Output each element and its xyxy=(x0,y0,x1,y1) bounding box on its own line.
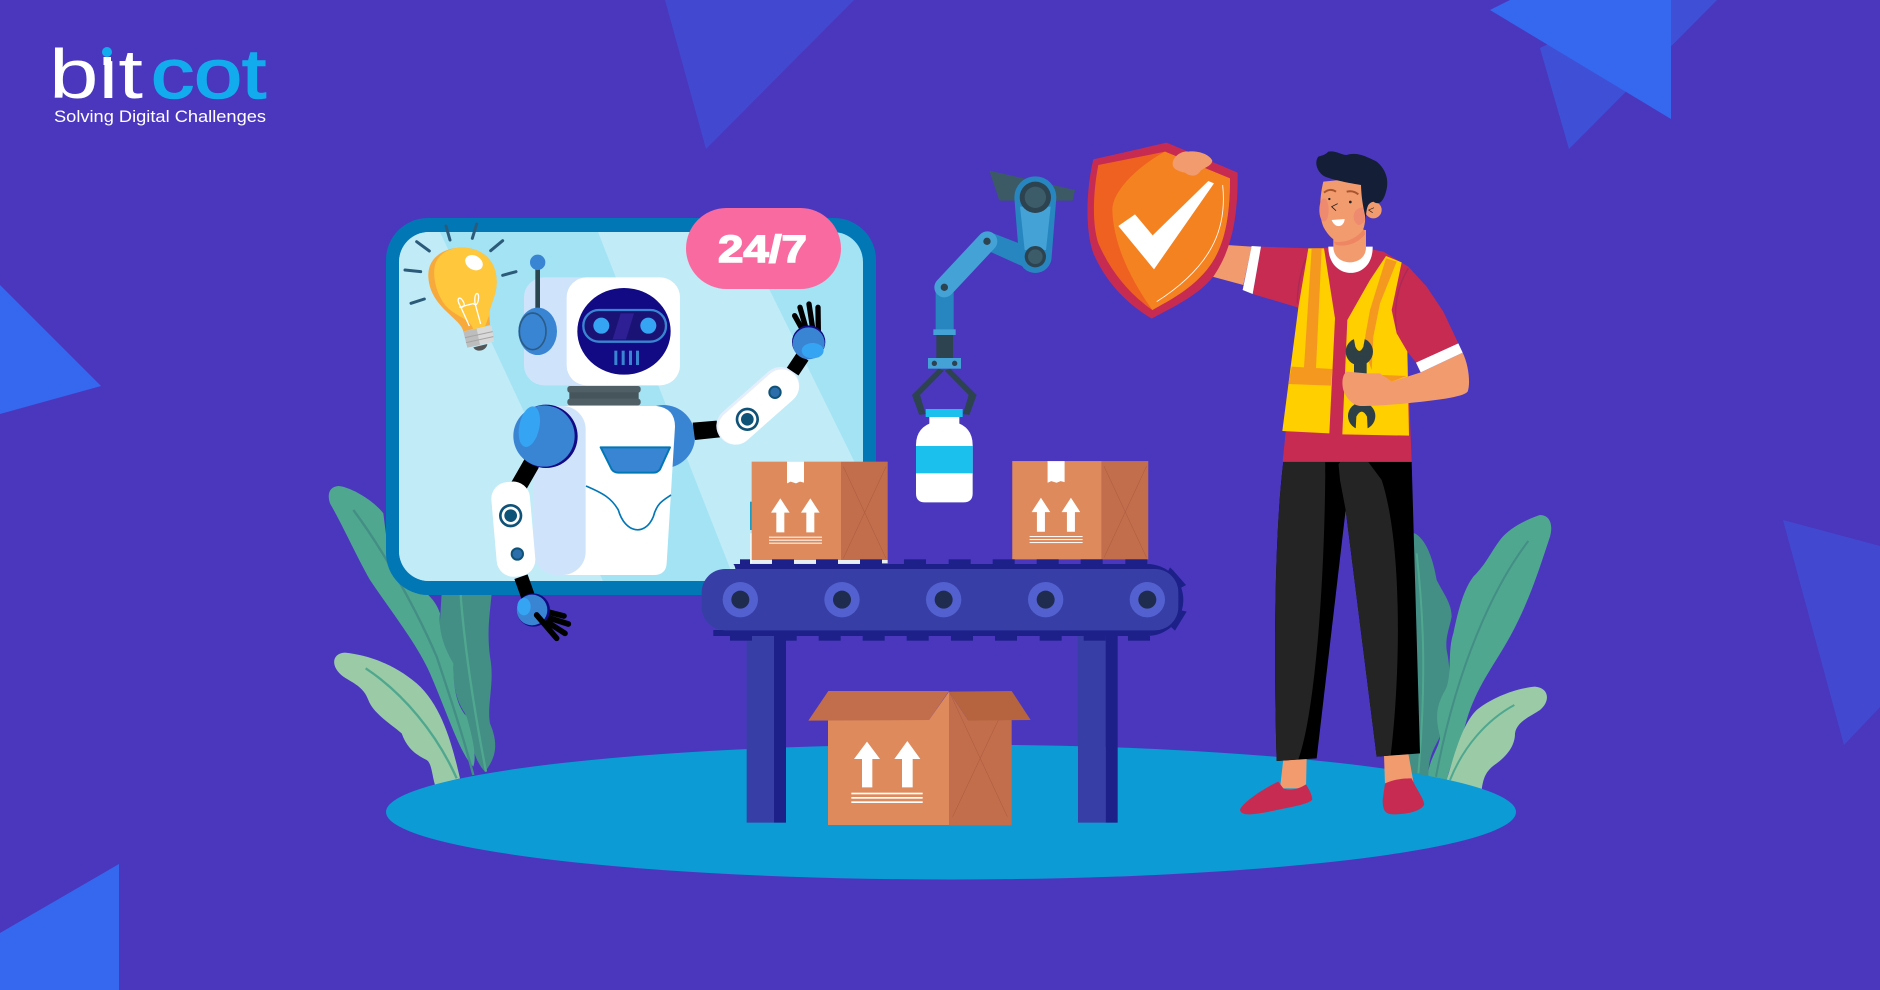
icon: bottle xyxy=(916,409,973,502)
box on belt: left xyxy=(750,462,888,563)
conveyor belt xyxy=(702,559,1187,641)
robot group, coordinates from zoom xyxy=(405,224,825,638)
worker head xyxy=(1316,151,1387,246)
worker legs and shoes xyxy=(1240,462,1424,814)
logo: bit xyxy=(49,35,143,113)
open cardboard box xyxy=(808,691,1031,825)
chest pocket xyxy=(601,447,670,473)
conveyor legs xyxy=(747,636,1118,823)
icon: light bulb xyxy=(405,224,516,351)
pill badge: 24/7: 24/7 xyxy=(718,229,807,271)
box on belt: right xyxy=(1012,461,1148,559)
robot neck xyxy=(567,386,641,405)
robot head xyxy=(518,255,680,385)
ground ellipse xyxy=(386,744,1516,880)
logo xyxy=(49,35,266,126)
forearm holding shield xyxy=(1210,245,1252,285)
logo: Solving Digital Challenges xyxy=(54,108,266,126)
monitor panel xyxy=(386,218,876,595)
plants: right xyxy=(1400,515,1551,790)
robot body xyxy=(533,406,675,575)
worker torso and vest xyxy=(1243,230,1469,462)
logo: cot xyxy=(151,35,266,113)
arm and hand with wrench xyxy=(1342,353,1469,406)
icon: shield with check xyxy=(1087,143,1238,319)
robot right arm xyxy=(632,304,825,468)
conveyor belt and open box xyxy=(702,559,1187,825)
robotic arm xyxy=(912,171,1075,415)
worker xyxy=(1240,151,1469,814)
robotic arm and bottle xyxy=(912,143,1252,502)
robot left arm xyxy=(490,404,578,638)
pill badge: 24/7 xyxy=(686,208,841,289)
icon: wrench xyxy=(1346,336,1375,430)
plants: left xyxy=(329,486,495,785)
